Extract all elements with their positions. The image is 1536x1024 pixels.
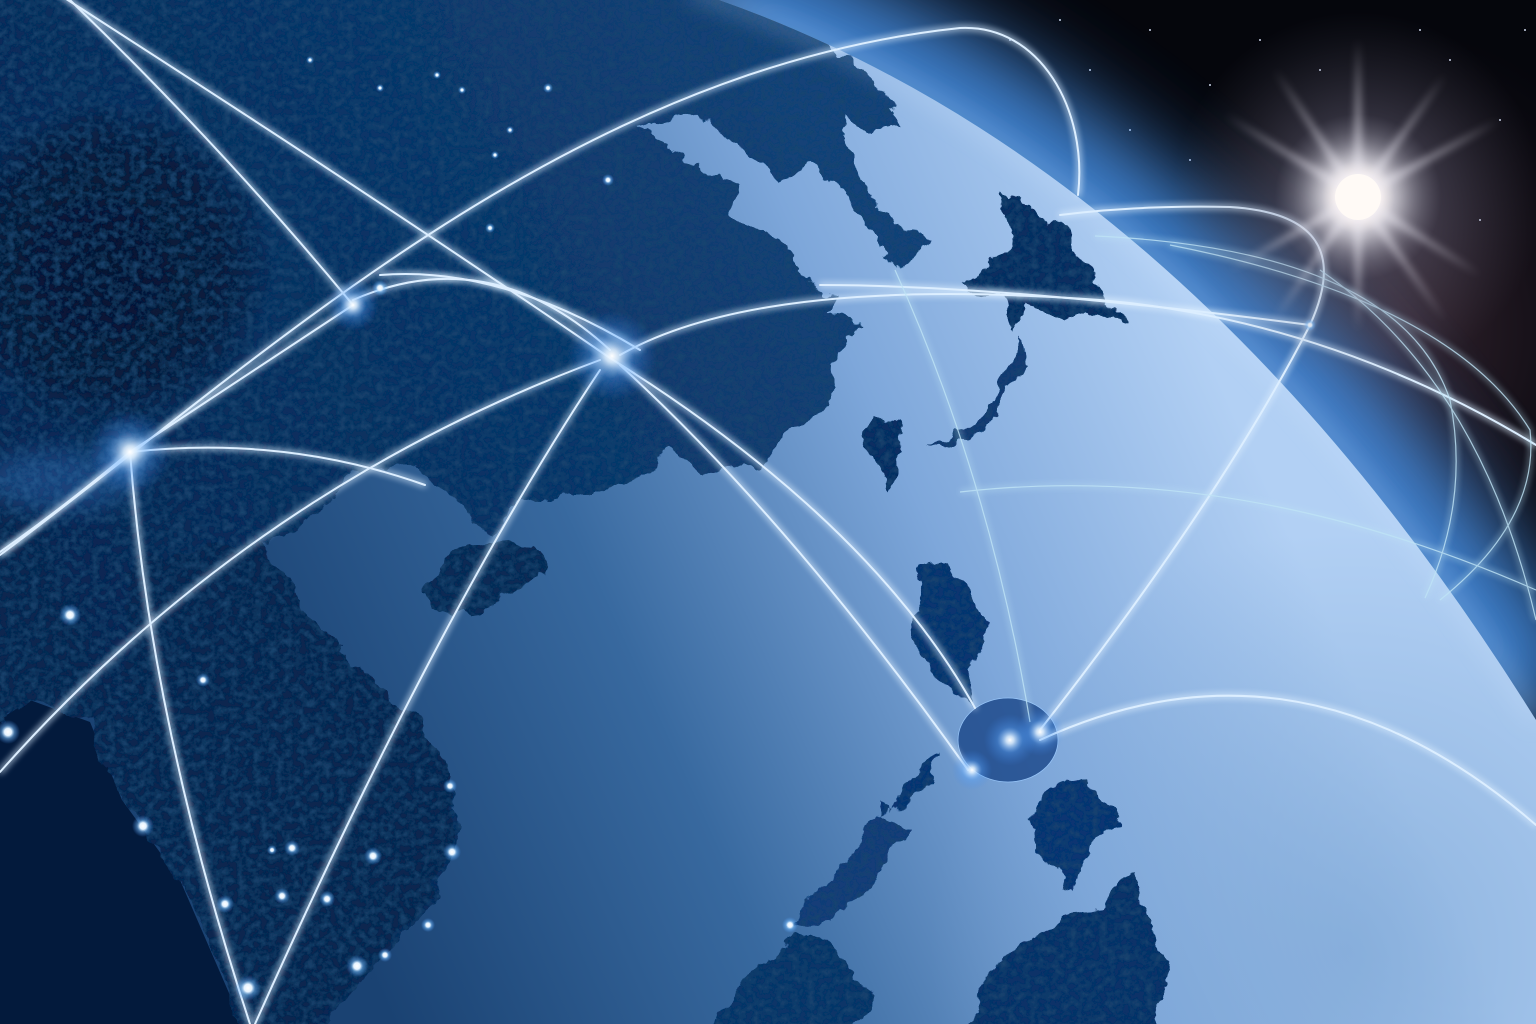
atmosphere glow around the globe limb: [690, 0, 1536, 720]
land: lower-left island: [700, 935, 872, 1024]
sun with star rays: [1173, 12, 1536, 382]
land: strip island: [790, 815, 912, 925]
faint arcs over the ocean and into space: [895, 236, 1536, 722]
network hubs: [88, 279, 1064, 790]
land: Japan and northern islands: [958, 190, 1122, 330]
relief: dark highlands: [0, 110, 267, 415]
globe limb highlight: [690, 0, 1536, 720]
glowing region: Mindanao focus: [958, 698, 1058, 782]
glow: city-light haze on the west coast: [0, 450, 140, 510]
city lights: [0, 56, 1316, 1001]
land: all continents and islands: [0, 0, 1170, 1024]
land: small arc islands: [925, 335, 1028, 448]
land: southern archipelago: [880, 750, 1118, 895]
land: lower-right island: [950, 870, 1170, 1024]
land: Luzon: [908, 560, 990, 705]
land: Taiwan: [860, 418, 898, 492]
relief: southern peninsula: [200, 542, 455, 942]
land: Asian mainland: [0, 0, 935, 1024]
land: Hainan: [425, 540, 547, 622]
land: dark sea at lower left: [0, 700, 250, 1024]
